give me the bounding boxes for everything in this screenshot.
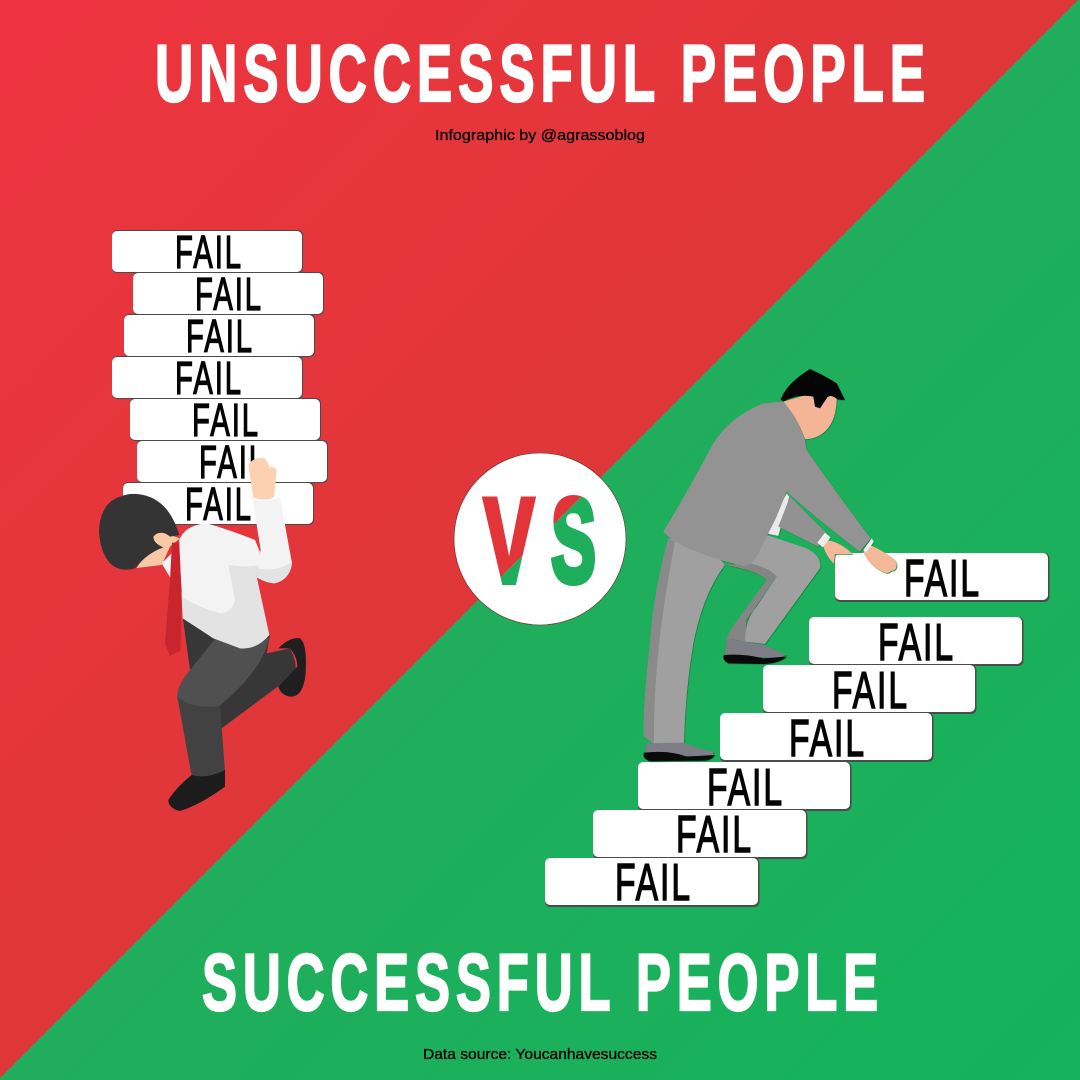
stack of fail blocks carried by the unsuccessful man bbox=[112, 226, 328, 530]
stack of fail blocks carried by the unsuccessful man: FAIL bbox=[195, 268, 263, 320]
stack of fail blocks carried by the unsuccessful man: FAIL bbox=[185, 478, 253, 530]
vs badge: S bbox=[551, 474, 596, 608]
vs badge bbox=[454, 453, 626, 625]
stack of fail blocks carried by the unsuccessful man: FAIL bbox=[175, 226, 243, 278]
staircase of fail blocks bbox=[545, 550, 1050, 912]
figure: successful man climbing steps bbox=[643, 369, 897, 761]
staircase of fail blocks: FAIL bbox=[789, 710, 866, 768]
staircase of fail blocks: FAIL bbox=[832, 662, 909, 720]
staircase of fail blocks: FAIL bbox=[904, 550, 981, 608]
staircase of fail blocks: FAIL bbox=[707, 759, 784, 817]
stack of fail blocks carried by the unsuccessful man: FAIL bbox=[175, 352, 243, 404]
stack of fail blocks carried by the unsuccessful man: FAIL bbox=[186, 310, 254, 362]
vs badge: V bbox=[484, 474, 534, 608]
stack of fail blocks carried by the unsuccessful man: FAIL bbox=[192, 394, 260, 446]
stack of fail blocks carried by the unsuccessful man: FAIL bbox=[199, 436, 267, 488]
credit: data source: Data source: Youcanhavesuccess bbox=[423, 1046, 657, 1063]
credit: infographic by: Infographic by @agrassoblog bbox=[435, 127, 645, 144]
staircase of fail blocks: FAIL bbox=[615, 854, 692, 912]
vs badge: V bbox=[484, 474, 534, 608]
figure: unsuccessful man carrying fails bbox=[99, 458, 306, 811]
staircase of fail blocks: FAIL bbox=[676, 806, 753, 864]
vs badge: S bbox=[551, 474, 596, 608]
staircase of fail blocks: FAIL bbox=[878, 614, 955, 672]
